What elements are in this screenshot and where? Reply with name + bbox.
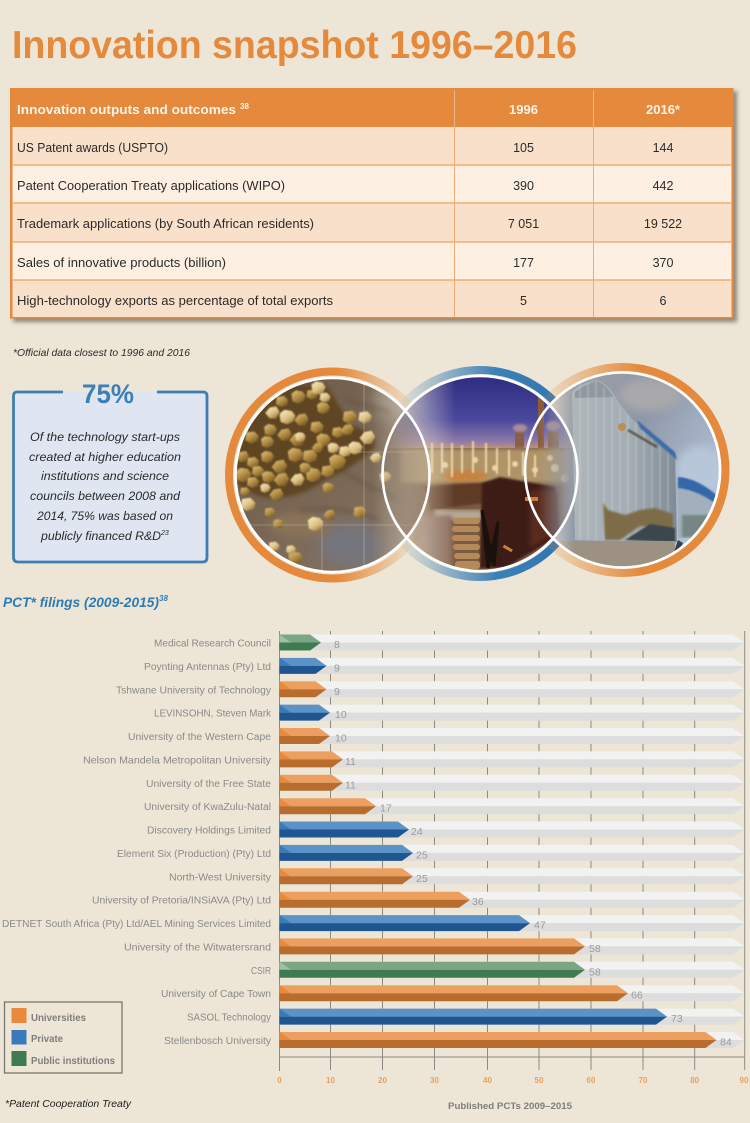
circle rings xyxy=(229,367,726,578)
row: US patent awards: US Patent awards (USPTO) xyxy=(17,141,168,155)
row: high-technology exports: High-technology exports as percentage of total exports xyxy=(17,294,333,308)
row: University of the Free State xyxy=(146,775,744,791)
row: Tshwane University of Technology xyxy=(116,681,744,698)
row: Tshwane University of Technology: Tshwane University of Technology xyxy=(116,685,271,696)
row: high-technology exports xyxy=(17,294,667,308)
row: SASOL Technology: SASOL Technology xyxy=(187,1013,271,1024)
row: trademark applications xyxy=(17,217,682,231)
callout figure: 75% xyxy=(82,379,134,409)
x-axis tick labels: 50 xyxy=(535,1076,544,1085)
row: trademark applications: Trademark applications (by South African residents) xyxy=(17,217,314,231)
photo: gold nuggets xyxy=(236,379,428,571)
table header row: 2016* xyxy=(646,102,681,117)
row: PCT applications: 442 xyxy=(653,179,673,193)
callout text: councils between 2008 and xyxy=(30,489,180,503)
row: LEVINSOHN xyxy=(154,705,744,721)
callout text: 2014, 75% was based on xyxy=(36,509,173,523)
callout: 75 percent xyxy=(14,379,207,562)
callout text xyxy=(29,430,181,543)
row: US patent awards xyxy=(17,141,673,155)
row: Element Six: Element Six (Production) (Pty) Ltd xyxy=(117,849,271,860)
table: innovation outputs and outcomes xyxy=(10,88,737,322)
row: University of the Witwatersrand: University of the Witwatersrand xyxy=(124,942,271,953)
row: University of KwaZulu-Natal: University of KwaZulu-Natal xyxy=(144,802,271,813)
row: University of the Western Cape: University of the Western Cape xyxy=(128,732,271,743)
row: Poynting Antennas: Poynting Antennas (Pty) Ltd xyxy=(144,662,271,673)
row: DETNET xyxy=(2,915,744,932)
row: University of the Witwatersrand xyxy=(124,938,744,955)
row: sales of innovative products: 370 xyxy=(653,256,673,270)
row: University of KwaZulu-Natal: 17 xyxy=(380,803,392,815)
callout text: publicly financed R&D xyxy=(40,529,161,543)
chart grid and axes xyxy=(279,631,745,1071)
row: University of Pretoria: University of Pretoria/INSiAVA (Pty) Ltd xyxy=(92,896,271,907)
row: University of the Western Cape: 10 xyxy=(335,732,347,744)
row: CSIR: CSIR xyxy=(251,966,271,977)
row: SASOL Technology: 73 xyxy=(671,1013,683,1025)
chart footnote: *Patent Cooperation Treaty xyxy=(5,1098,132,1110)
x-axis tick labels: 20 xyxy=(378,1076,387,1085)
legend xyxy=(4,1002,122,1073)
row: Nelson Mandela Metropolitan University: Nelson Mandela Metropolitan University xyxy=(83,755,271,766)
row: trademark applications: 19 522 xyxy=(644,217,682,231)
row: Medical Research Council xyxy=(154,634,744,651)
row: Discovery Holdings Limited: Discovery Holdings Limited xyxy=(147,826,271,836)
legend: public institutions: Public institutions xyxy=(31,1055,115,1067)
row: University of the Western Cape xyxy=(128,728,744,744)
row: LEVINSOHN: LEVINSOHN, Steven Mark xyxy=(154,709,272,720)
x-axis tick labels: 70 xyxy=(639,1076,648,1085)
row: high-technology exports: 5 xyxy=(520,294,527,308)
title: Innovation snapshot 1996–2016 xyxy=(12,24,577,67)
row: University of the Witwatersrand: 58 xyxy=(589,943,601,955)
photo: industrial plant xyxy=(392,377,572,570)
table footnote: *Official data closest to 1996 and 2016 xyxy=(13,347,190,359)
row: PCT applications xyxy=(17,179,673,193)
row: Discovery Holdings Limited xyxy=(147,822,744,838)
chart heading: PCT* filings (2009-2015) xyxy=(3,594,159,610)
legend: universities: Universities xyxy=(31,1012,86,1024)
table header row: Innovation outputs and outcomes xyxy=(17,102,236,117)
row: PCT applications: Patent Cooperation Treaty applications (WIPO) xyxy=(17,179,285,193)
x-axis tick labels xyxy=(277,1076,749,1085)
row: CSIR xyxy=(251,962,744,978)
x-axis tick labels: 30 xyxy=(430,1076,439,1085)
row: University of Pretoria: 36 xyxy=(472,896,484,908)
x-axis tick labels: 10 xyxy=(326,1076,335,1085)
row: sales of innovative products: 177 xyxy=(513,256,534,270)
row: Stellenbosch University: Stellenbosch University xyxy=(164,1036,271,1047)
x-axis tick labels: 0 xyxy=(277,1076,282,1085)
x-axis tick labels: 80 xyxy=(690,1076,700,1085)
row: DETNET: 47 xyxy=(534,920,546,932)
x-axis tick labels: 60 xyxy=(587,1076,596,1085)
legend: private: Private xyxy=(31,1033,63,1045)
callout text: institutions and science xyxy=(41,469,169,483)
callout text: 23 xyxy=(160,530,169,537)
row: Stellenbosch University xyxy=(164,1032,744,1048)
row: University of the Free State: University of the Free State xyxy=(146,779,271,790)
three overlapping circular photos xyxy=(229,367,726,578)
row: Tshwane University of Technology: 9 xyxy=(334,686,340,698)
row: high-technology exports: 6 xyxy=(660,294,667,308)
row: SASOL Technology xyxy=(187,1009,744,1025)
x-axis tick labels: 90 xyxy=(740,1076,749,1085)
row: sales of innovative products: Sales of innovative products (billion) xyxy=(17,256,226,270)
row: North-West University: 25 xyxy=(416,873,428,885)
chart heading: 38 xyxy=(159,594,168,603)
row: University of Cape Town: 66 xyxy=(631,990,643,1002)
row: University of the Free State: 11 xyxy=(345,779,356,791)
row: Element Six: 25 xyxy=(416,849,428,861)
row: Poynting Antennas xyxy=(144,658,744,674)
row: PCT applications: 390 xyxy=(513,179,534,193)
x-axis title: Published PCTs 2009–2015 xyxy=(448,1101,573,1112)
row: DETNET: DETNET South Africa (Pty) Ltd/AEL Mining Services Limited xyxy=(2,919,271,930)
row: Medical Research Council: 8 xyxy=(334,639,340,651)
row: LEVINSOHN: 10 xyxy=(335,709,347,721)
row: University of Cape Town: University of Cape Town xyxy=(161,989,271,1000)
row: North-West University xyxy=(169,868,744,885)
callout text: Of the technology start-ups xyxy=(30,430,180,444)
row: US patent awards: 144 xyxy=(653,141,673,155)
row: North-West University: North-West University xyxy=(169,872,271,883)
bar chart: PCT filings xyxy=(2,631,749,1112)
row: trademark applications: 7 051 xyxy=(508,217,539,231)
row: CSIR: 58 xyxy=(589,966,601,978)
row: US patent awards: 105 xyxy=(513,141,534,155)
row: University of Pretoria xyxy=(92,892,744,908)
row: Nelson Mandela Metropolitan University: 11 xyxy=(345,756,356,768)
table header row xyxy=(17,102,681,117)
row: University of Cape Town xyxy=(161,985,744,1002)
row: University of KwaZulu-Natal xyxy=(144,798,744,815)
white circle outlines xyxy=(236,372,720,572)
row: Discovery Holdings Limited: 24 xyxy=(411,826,423,838)
callout text: created at higher education xyxy=(29,450,181,464)
row: Stellenbosch University: 84 xyxy=(720,1036,732,1048)
row: Medical Research Council: Medical Research Council xyxy=(154,638,271,650)
table header row: 1996 xyxy=(509,102,538,117)
row: Poynting Antennas: 9 xyxy=(334,662,340,674)
x-axis tick labels: 40 xyxy=(483,1076,492,1085)
row: Nelson Mandela Metropolitan University xyxy=(83,751,744,768)
photo: glass office building xyxy=(540,374,719,566)
table header row: 38 xyxy=(240,102,249,111)
row: sales of innovative products xyxy=(17,256,673,270)
row: Element Six xyxy=(117,845,744,861)
